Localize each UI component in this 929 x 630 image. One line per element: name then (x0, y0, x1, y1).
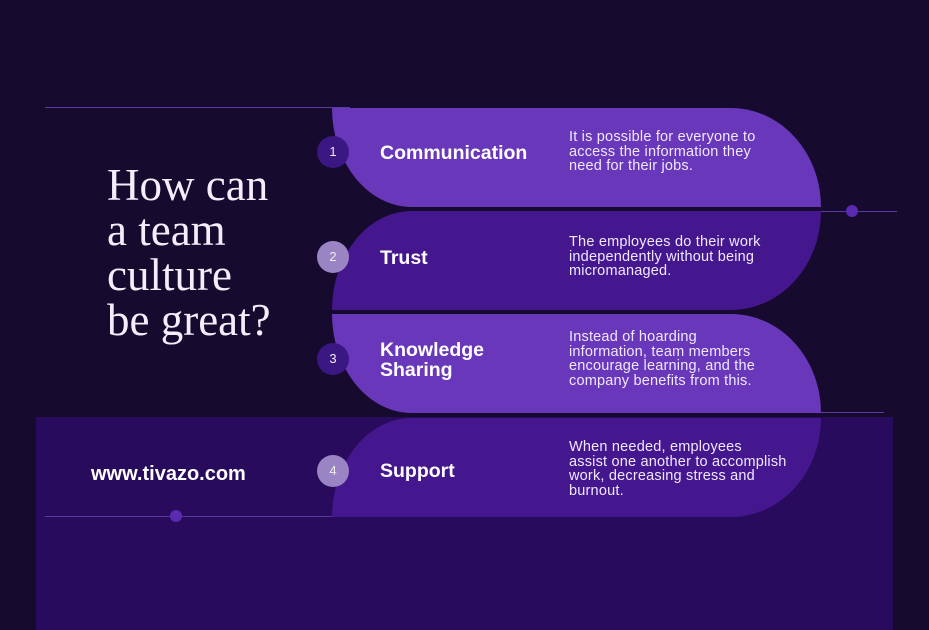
title: culture (107, 250, 232, 300)
desc 1: access the information they (569, 144, 751, 160)
dot left (170, 510, 182, 522)
number 4: 4 (329, 463, 337, 478)
desc 1: It is possible for everyone to (569, 129, 756, 145)
website: www.tivazo.com (91, 463, 246, 485)
desc 2: independently without being (569, 248, 754, 264)
desc 2 (569, 234, 761, 279)
number 3: 3 (329, 351, 337, 366)
number 1 (317, 136, 349, 168)
title: be great? (107, 295, 271, 345)
desc 4: burnout. (569, 482, 624, 498)
heading: knowledge sharing (380, 339, 484, 381)
desc 1: need for their jobs. (569, 158, 693, 174)
panel: support (332, 418, 821, 517)
panel: trust (332, 211, 821, 310)
bottom background panel (36, 417, 893, 630)
desc 3: encourage learning, and the (569, 358, 755, 374)
desc 1 (569, 129, 756, 174)
number 2 (317, 241, 349, 273)
desc 3 (569, 329, 755, 388)
heading: trust: Trust (380, 247, 428, 269)
desc 4: work, decreasing stress and (569, 468, 755, 484)
desc 2: The employees do their work (569, 234, 761, 250)
title: a team (107, 205, 226, 255)
desc 4: assist one another to accomplish (569, 454, 787, 470)
title: How can (107, 160, 268, 210)
dot right (846, 205, 858, 217)
desc 4 (569, 439, 787, 498)
heading: support: Support (380, 460, 455, 482)
number 3 (317, 343, 349, 375)
number 4 (317, 455, 349, 487)
heading: knowledge sharing: Knowledge (380, 339, 484, 361)
title (107, 160, 271, 345)
desc 3: Instead of hoarding (569, 329, 697, 345)
heading: knowledge sharing: Sharing (380, 359, 453, 381)
desc 3: company benefits from this. (569, 372, 752, 388)
desc 3: information, team members (569, 344, 750, 360)
panel: communication (332, 108, 821, 207)
desc 2: micromanaged. (569, 263, 672, 279)
number 1: 1 (329, 144, 337, 159)
heading: communication: Communication (380, 142, 527, 164)
number 2: 2 (329, 249, 337, 264)
desc 4: When needed, employees (569, 439, 742, 455)
panel: knowledge sharing (332, 314, 821, 413)
